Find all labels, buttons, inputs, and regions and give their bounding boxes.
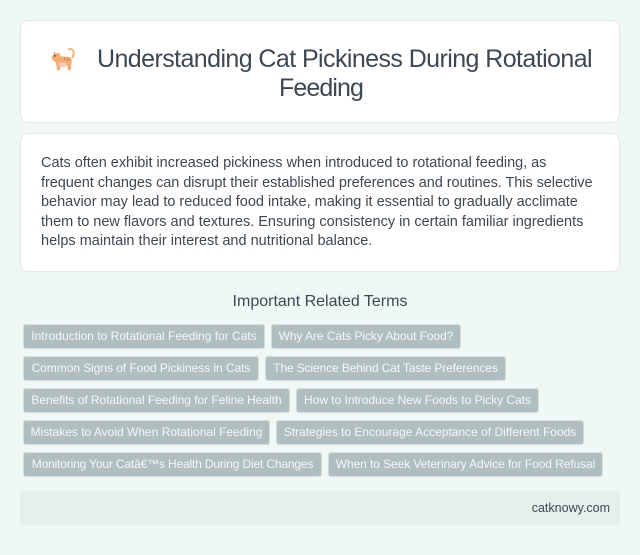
tag: Benefits of Rotational Feeding for Feline Health (31, 393, 282, 407)
icon: cat (52, 48, 74, 70)
tag (23, 324, 265, 349)
tag (271, 324, 461, 349)
tag (23, 388, 290, 413)
tag (23, 452, 322, 477)
tag (296, 388, 539, 413)
tag: Strategies to Encourage Acceptance of Different Foods (284, 425, 576, 439)
tag: The Science Behind Cat Taste Preferences (273, 361, 498, 375)
title: Feeding (279, 74, 363, 102)
summary text: behavior may lead to reduced food intake, making it essential to gradually acclimate (41, 194, 578, 210)
footer (20, 491, 620, 525)
site credit: catknowy.com (532, 501, 610, 515)
tag (276, 420, 584, 445)
tag: Mistakes to Avoid When Rotational Feeding (31, 425, 262, 439)
tag: How to Introduce New Foods to Picky Cats (304, 393, 531, 407)
tag: Monitoring Your Catâ€™s Health During Diet Changes (32, 457, 313, 471)
term tags (23, 324, 603, 477)
summary text (41, 155, 592, 249)
tag (265, 356, 506, 381)
tag: When to Seek Veterinary Advice for Food Refusal (336, 457, 595, 471)
summary text: helps maintain their interest and nutritional balance. (41, 233, 372, 249)
summary text: them to new flavors and textures. Ensuring consistency in certain familiar ingredients (41, 214, 583, 230)
title (97, 45, 592, 102)
panel: title card (20, 20, 620, 123)
summary text: Cats often exhibit increased pickiness when introduced to rotational feeding, as (41, 155, 546, 171)
tag: Common Signs of Food Pickiness in Cats (32, 361, 250, 375)
tag: Introduction to Rotational Feeding for Cats (31, 329, 257, 343)
panel: summary card (20, 133, 620, 272)
title: Understanding Cat Pickiness During Rotational (97, 45, 592, 73)
summary text: frequent changes can disrupt their established preferences and routines. This selective (41, 174, 592, 190)
tag (23, 356, 259, 381)
heading: related terms: Important Related Terms (233, 293, 407, 310)
tag (23, 420, 270, 445)
tag: Why Are Cats Picky About Food? (279, 329, 453, 343)
tag (328, 452, 603, 477)
